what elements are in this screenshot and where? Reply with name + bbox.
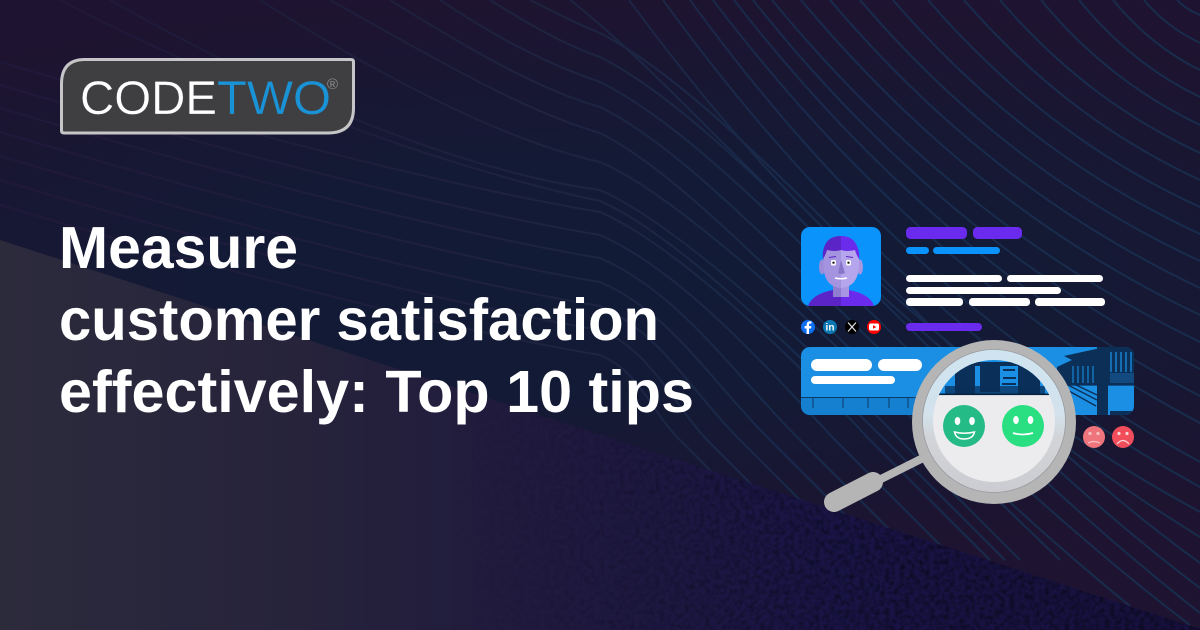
icon: sad face [1083,426,1105,448]
avatar portrait [801,227,881,306]
icon: smiling face [1002,405,1044,447]
magnifier handle [834,458,923,502]
illustration: email signature under magnifier [801,227,1134,504]
social icons [801,320,881,334]
icon: very sad face [1112,426,1134,448]
title: Measure [59,215,298,281]
title: customer satisfaction [59,287,659,353]
signature link bar [906,323,982,331]
signature role bars [906,247,1000,254]
icon: youtube [867,320,881,334]
signature name bars [906,227,1022,239]
signature text bars [906,275,1105,306]
title: effectively: Top 10 tips [59,359,694,425]
logo: CodeTwo: TWO [217,71,331,124]
logo: CodeTwo [62,60,354,133]
magnifier rim [912,340,1076,504]
title [59,215,694,425]
icon: facebook [801,320,815,334]
icon: grinning face [943,405,985,447]
magnifying glass [834,340,1076,504]
magnified content [933,360,1055,482]
logo: CodeTwo: CODE [80,71,217,124]
banner [801,347,1134,415]
icon: linkedin: in [826,322,834,334]
magnifier glass [922,350,1066,492]
icon: X [845,320,859,334]
diagonal lower wedge [0,240,1200,630]
logo: CodeTwo: ® [327,76,338,93]
